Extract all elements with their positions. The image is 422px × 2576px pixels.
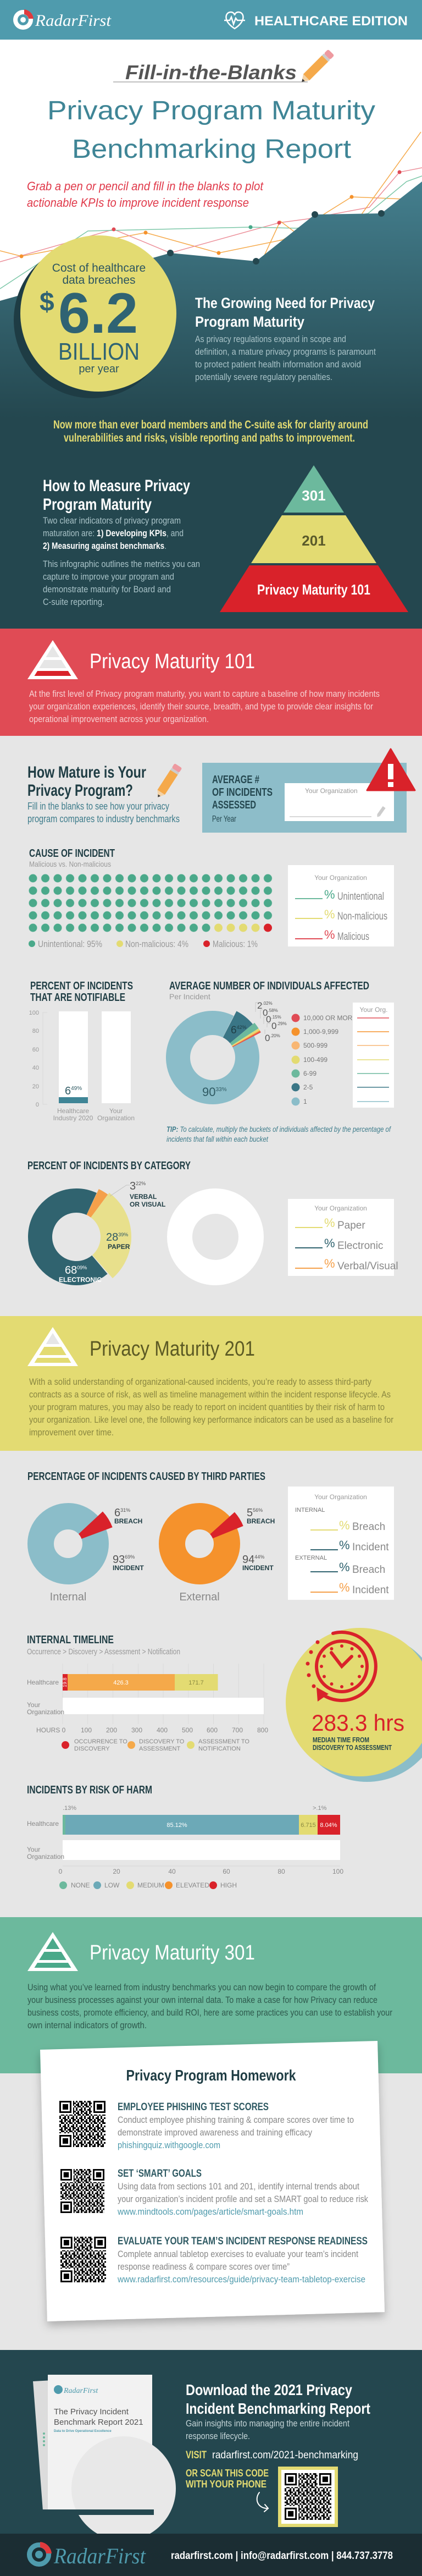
callout: cost circle: Cost of healthcare: [52, 262, 146, 274]
chart: incidents by risk of harm: Organization: [27, 1853, 64, 1861]
callout: median time circle: MEDIAN TIME FROM: [313, 1736, 369, 1744]
chart: cause of incident dots: [27, 847, 274, 949]
panel: download report: Incident Benchmarking Report: [186, 2400, 370, 2417]
panel: your org cause: Your Organization: [314, 874, 367, 882]
QR code: [278, 2467, 338, 2527]
chart: maturity pyramid: [220, 465, 408, 612]
chart: individuals affected donut: 6: [231, 1025, 237, 1036]
text block: how to measure: maturation are: 1) Developing KPIs, and: [43, 528, 184, 538]
panel: your org individuals: [353, 1003, 394, 1108]
chart: incidents by category: OR VISUAL: [130, 1201, 165, 1208]
logo: RadarFirst: RadarFirst: [35, 12, 112, 30]
item: tabletop: response readiness & compare scores over time”: [118, 2261, 290, 2272]
chart: internal timeline: 426.3: [113, 1680, 129, 1686]
chart: incidents by risk of harm: 100: [332, 1868, 343, 1875]
panel: download report: [0, 2350, 422, 2541]
chart: third parties donuts: PERCENTAGE OF INCIDENTS CAUSED BY THIRD PARTIES: [27, 1471, 265, 1483]
chart: internal timeline: 400: [157, 1726, 168, 1734]
panel: your org third parties: EXTERNAL: [295, 1555, 327, 1561]
callout: median time circle: 283.3 hrs: [312, 1710, 404, 1736]
internal donut: [25, 1500, 144, 1603]
chart: percent notifiable bars: 0: [36, 1102, 39, 1108]
chart: individuals affected donut: .15%: [271, 1015, 281, 1020]
chart: percent notifiable bars: PERCENT OF INCIDENTS: [30, 980, 133, 992]
heading: how mature: How Mature is Your: [27, 763, 146, 781]
text: 301 intro: Using what you’ve learned from industry benchmarks you can now begin to compare the growth of: [27, 1982, 376, 1992]
panel: your org category: %: [324, 1236, 335, 1250]
external donut: External: [179, 1591, 220, 1603]
icon: pencil: [154, 763, 182, 800]
internal donut: 93: [113, 1554, 125, 1566]
chart: individuals affected donut: 90: [202, 1085, 215, 1099]
main title: Benchmarking Report: [72, 135, 351, 164]
legend: 2-5: [303, 1083, 313, 1091]
panel: average incidents: Your Organization: [305, 787, 358, 795]
heading: how mature: [27, 763, 182, 824]
panel: your org cause: Unintentional: [337, 891, 384, 902]
chart: incidents by risk of harm: 8.04%: [320, 1822, 337, 1829]
text block: growing need: As privacy regulations expand in scope and: [195, 334, 346, 344]
chart: individuals affected donut: 0: [265, 1033, 270, 1043]
legend: [59, 1881, 237, 1889]
tip text: [166, 1125, 392, 1143]
text: 301 intro: [27, 1982, 392, 2030]
chart: percent notifiable bars: Your: [109, 1107, 123, 1115]
chart: cause of incident dots: CAUSE OF INCIDENT: [29, 847, 115, 860]
chart: internal timeline: 200: [106, 1726, 117, 1734]
chart: individuals affected donut: 42%: [237, 1025, 247, 1030]
chart: percent notifiable bars: 6: [65, 1085, 71, 1097]
chart: incidents by risk of harm: 85.12%: [166, 1822, 187, 1829]
chart: internal timeline: Organization: [27, 1708, 64, 1716]
chart: internal timeline: 600: [207, 1726, 218, 1734]
item: tabletop: [60, 2236, 368, 2285]
chart: percent notifiable bars: Healthcare: [57, 1107, 89, 1115]
chart: incidents by risk of harm: Healthcare: [27, 1820, 59, 1828]
panel: your org cause: Malicious: [337, 931, 369, 943]
legend: 1,000-9,999: [303, 1028, 338, 1036]
chart: internal timeline: HOURS: [36, 1726, 60, 1734]
chart: incidents by risk of harm: 20: [113, 1868, 120, 1875]
chart: maturity pyramid: 201: [302, 532, 326, 549]
panel: privacy maturity 101 banner: [0, 629, 422, 736]
chart: internal timeline: Your: [27, 1701, 40, 1709]
chart: incidents by risk of harm: Your: [27, 1846, 40, 1853]
chart: individuals affected donut: .58%: [268, 1008, 278, 1013]
internal donut: BREACH: [114, 1517, 142, 1525]
panel: average incidents: ASSESSED: [212, 799, 256, 811]
heading: how mature: Privacy Program?: [27, 781, 133, 800]
text: 201 intro: improvement over time.: [29, 1427, 114, 1438]
chart: incidents by category: ELECTRONIC: [59, 1276, 102, 1284]
chart: percent notifiable bars: 49%: [71, 1086, 82, 1092]
text block: growing need: potentially severe regulatory penalties.: [195, 372, 332, 382]
heading: 301: Privacy Maturity 301: [90, 1941, 255, 1964]
external donut: 56%: [253, 1507, 263, 1513]
chart: incidents by risk of harm: [27, 1784, 343, 1889]
chart: percent notifiable bars: Industry 2020: [53, 1114, 93, 1122]
item: smart goals: [60, 2168, 368, 2217]
chart: percent notifiable bars: [29, 980, 135, 1122]
chart: internal timeline: 19.8: [62, 1677, 68, 1687]
panel: your org third parties: INTERNAL: [295, 1507, 325, 1513]
fill-in-the-blanks heading: Fill-in-the-Blanks: [125, 61, 297, 84]
text block: growing need: definition, a mature privacy programs is paramount: [195, 346, 376, 357]
callout: cost circle: [14, 235, 176, 398]
callout: cost circle: per year: [79, 363, 119, 375]
chart: incidents by risk of harm: 6.715: [301, 1822, 316, 1829]
icon: pyramid 101: [27, 640, 78, 679]
legend: Non-malicious: 4%: [125, 939, 188, 949]
text block: how to measure: [43, 477, 200, 607]
subtitle red: [27, 179, 264, 210]
text block: growing need: Program Maturity: [195, 313, 304, 330]
chart: percent notifiable bars: 60: [32, 1047, 39, 1053]
chart: maturity pyramid: 301: [302, 487, 326, 504]
item: smart goals: Using data from sections 101 and 201, identify internal trends about: [118, 2181, 359, 2192]
panel: your org third parties: Your Organization: [314, 1493, 367, 1501]
chart: third parties donuts: [25, 1471, 275, 1603]
chart: internal timeline: 800: [257, 1726, 268, 1734]
book image: Data to Drive Operational Excellence: [54, 2430, 112, 2433]
chart: individuals affected donut: 0: [263, 1008, 268, 1018]
chart: incidents by category: [21, 1160, 251, 1292]
legend: 100-499: [303, 1056, 327, 1064]
callout: cost circle: data breaches: [62, 274, 136, 287]
footer: [0, 2534, 422, 2576]
internal donut: 31%: [120, 1507, 130, 1513]
text block: how to measure: This infographic outlines the metrics you can: [43, 559, 200, 569]
heading: 101: Privacy Maturity 101: [90, 650, 255, 673]
panel: your org third parties: %: [339, 1560, 350, 1574]
legend: 500-999: [303, 1042, 327, 1049]
icon: heart ECG: [224, 12, 245, 29]
item: phishing: [59, 2101, 354, 2150]
callout: cost circle: BILLION: [58, 338, 140, 365]
chart: internal timeline: 100: [81, 1726, 92, 1734]
text: 201 intro: With a solid understanding of organizational-caused incidents, you’re ready to assess third-party: [29, 1377, 371, 1387]
external donut: 5: [247, 1507, 253, 1519]
chart: percent notifiable bars: 100: [29, 1010, 39, 1016]
panel: average incidents: [202, 749, 415, 833]
panel: your org third parties: %: [339, 1518, 350, 1532]
chart: individuals affected donut: AVERAGE NUMBER OF INDIVIDUALS AFFECTED: [169, 980, 369, 992]
callout: median time circle: [286, 1628, 422, 1782]
text: 301 intro: own internal indicators of growth.: [27, 2020, 147, 2030]
panel: average incidents: OF INCIDENTS: [212, 786, 273, 799]
logo: RadarFirst: [13, 9, 112, 30]
item: tabletop: EVALUATE YOUR TEAM’S INCIDENT RESPONSE READINESS: [118, 2236, 368, 2247]
chart: incidents by category: 39%: [118, 1232, 128, 1237]
chart: individuals affected donut: 33%: [215, 1087, 227, 1093]
text block: how to measure: 2) Measuring against benchmarks.: [43, 541, 166, 551]
panel: your org individuals: Your Org.: [360, 1006, 387, 1014]
panel: your org third parties: [288, 1487, 394, 1600]
chart: incidents by category: 3: [130, 1180, 136, 1192]
legend: 6-99: [303, 1070, 316, 1077]
chart: percent notifiable bars: 80: [32, 1028, 39, 1034]
panel: download report: Gain insights into managing the entire incident: [186, 2418, 349, 2429]
contact info: radarfirst.com | info@radarfirst.com | 844.737.3778: [171, 2550, 393, 2562]
panel: homework card: Privacy Program Homework: [126, 2067, 296, 2084]
chart: internal timeline: 171.7: [188, 1680, 204, 1686]
decorative line chart: [0, 132, 422, 289]
panel: homework card: [40, 2041, 385, 2321]
external donut: 44%: [254, 1554, 264, 1560]
footer logo: [27, 2542, 146, 2568]
panel: your org category: %: [324, 1257, 335, 1270]
panel: your org category: [288, 1199, 398, 1276]
internal donut: INCIDENT: [113, 1564, 144, 1572]
panel: your org third parties: Breach: [352, 1564, 385, 1576]
chart: percent notifiable bars: 20: [32, 1083, 39, 1090]
edition label: HEALTHCARE EDITION: [254, 14, 408, 29]
item: tabletop: Complete annual tabletop exercises to evaluate your team’s incident: [118, 2249, 358, 2259]
panel: your org category: Paper: [337, 1220, 365, 1231]
external donut: [156, 1500, 275, 1603]
chart: internal timeline: Healthcare: [27, 1678, 59, 1686]
book image: [33, 2375, 176, 2541]
header bar: [0, 0, 422, 40]
legend: Malicious: 1%: [213, 939, 258, 949]
text: 101 intro: your organization experiences, identify their source, breadth, and type to provide clear insights for: [29, 701, 373, 712]
heading: 201: Privacy Maturity 201: [90, 1337, 255, 1361]
panel: your org third parties: Incident: [352, 1542, 389, 1553]
chart: individuals affected donut: .20%: [270, 1033, 280, 1038]
text block: how to measure: demonstrate maturity for Board and: [43, 584, 171, 595]
legend: ASSESSMENT: [139, 1746, 180, 1752]
chart: internal timeline: 500: [182, 1726, 193, 1734]
chart: incidents by risk of harm: .13%: [63, 1805, 76, 1812]
item: smart goals: SET ‘SMART’ GOALS: [118, 2168, 202, 2179]
panel: your org third parties: Breach: [352, 1521, 385, 1533]
icon: pyramid 201: [27, 1327, 78, 1366]
panel: privacy maturity 201 banner: [0, 1316, 422, 1451]
legend: [291, 1014, 357, 1105]
internal donut: 6: [114, 1507, 120, 1519]
chart: individuals affected donut: 0: [271, 1021, 276, 1031]
panel: your org category: Verbal/Visual: [337, 1261, 398, 1272]
callout: median time circle: DISCOVERY TO ASSESSMENT: [313, 1743, 392, 1752]
text block: growing need: to protect patient health information and avoid: [195, 359, 361, 370]
panel: your org cause: %: [324, 928, 335, 942]
panel: download report: OR SCAN THIS CODE: [186, 2468, 269, 2479]
chart: percent notifiable bars: THAT ARE NOTIFIABLE: [30, 992, 125, 1004]
panel: download report: radarfirst.com/2021-benchmarking: [212, 2450, 358, 2461]
chart: individuals affected donut: 2: [257, 1000, 262, 1011]
item: phishing: Conduct employee phishing training & compare scores over time to: [118, 2115, 354, 2125]
panel: your org cause: [288, 865, 394, 946]
book image: Benchmark Report 2021: [54, 2418, 143, 2427]
chart: internal timeline: INTERNAL TIMELINE: [27, 1634, 114, 1646]
panel: average incidents: AVERAGE #: [212, 774, 259, 786]
panel: your org category: Electronic: [337, 1240, 383, 1252]
text: 201 intro: [29, 1377, 393, 1438]
external donut: INCIDENT: [242, 1564, 274, 1572]
callout: cost circle: 6.2: [58, 282, 138, 345]
legend: OCCURRENCE TO: [74, 1738, 127, 1745]
legend: Unintentional: 95%: [38, 939, 102, 949]
panel: your org cause: Non-malicious: [337, 911, 387, 922]
item: tabletop: www.radarfirst.com/resources/guide/privacy-team-tabletop-exercise: [117, 2274, 365, 2285]
book image: The Privacy Incident: [54, 2407, 129, 2417]
legend: LOW: [104, 1881, 120, 1889]
heading: how mature: program compares to industry benchmarks: [27, 813, 180, 824]
chart: internal timeline: [27, 1634, 268, 1752]
icon: clock: [306, 1632, 376, 1702]
callout: cost circle: $: [40, 288, 54, 317]
chart: incidents by risk of harm: 60: [223, 1868, 230, 1875]
legend: [62, 1738, 249, 1752]
internal donut: Internal: [50, 1591, 86, 1603]
chart: incidents by category: 09%: [77, 1265, 87, 1270]
item: phishing: EMPLOYEE PHISHING TEST SCORES: [118, 2101, 269, 2113]
chart: incidents by category: PERCENT OF INCIDENTS BY CATEGORY: [27, 1160, 191, 1172]
legend: HIGH: [220, 1881, 237, 1889]
heading: how mature: Fill in the blanks to see how your privacy: [27, 801, 169, 812]
chart: incidents by risk of harm: 0: [59, 1868, 63, 1875]
text block: how to measure: Two clear indicators of privacy program: [43, 515, 181, 526]
legend: NONE: [71, 1881, 90, 1889]
chart: internal timeline: 300: [131, 1726, 142, 1734]
chart: percent notifiable bars: 40: [32, 1065, 39, 1071]
icon: pencil: [298, 49, 335, 85]
item: smart goals: www.mindtools.com/pages/article/smart-goals.htm: [117, 2206, 303, 2217]
chart: individuals affected donut: [158, 980, 369, 1112]
panel: your org third parties: %: [339, 1538, 350, 1552]
panel: your org cause: %: [324, 907, 335, 921]
chart: incidents by category: 22%: [136, 1181, 146, 1186]
item: phishing: demonstrate improved awareness and training efficacy: [118, 2127, 312, 2138]
chart: individuals affected donut: .29%: [276, 1021, 287, 1026]
hero white background: [0, 40, 422, 315]
chart: individuals affected donut: Per Incident: [169, 992, 210, 1001]
chart: incidents by risk of harm: >.1%: [313, 1805, 327, 1812]
fill-in-the-blanks heading: [113, 49, 335, 85]
legend: NOTIFICATION: [198, 1746, 241, 1752]
text block: growing need: [195, 295, 376, 382]
panel: your org cause: %: [324, 888, 335, 901]
chart: incidents by risk of harm: 80: [277, 1868, 285, 1875]
blank donut: [180, 1201, 251, 1273]
subtitle red: actionable KPIs to improve incident response: [27, 196, 249, 210]
legend: DISCOVERY: [74, 1746, 110, 1752]
panel: teal intro: [0, 181, 422, 629]
icon: warning: [367, 749, 415, 790]
subtitle red: Grab a pen or pencil and fill in the blanks to plot: [27, 179, 264, 193]
text: 101 intro: [29, 689, 380, 724]
legend: 10,000 OR MORE: [303, 1014, 357, 1022]
panel: your org category: %: [324, 1216, 335, 1230]
item: smart goals: your organization’s incident profile and set a SMART goal to reduce risk: [118, 2194, 368, 2204]
panel: your org category: Your Organization: [314, 1204, 367, 1212]
panel: privacy maturity 301 banner: [0, 1917, 422, 2073]
text block: how to measure: Program Maturity: [43, 496, 152, 514]
legend: [29, 939, 258, 949]
external donut: BREACH: [247, 1517, 275, 1525]
legend: MEDIUM: [137, 1881, 164, 1889]
internal donut: 69%: [125, 1554, 135, 1560]
arrow: [257, 2492, 268, 2512]
chart: incidents by category: 28: [106, 1231, 118, 1243]
chart: cause of incident dots: Malicious vs. Non-malicious: [29, 860, 111, 868]
panel: your org third parties: Incident: [352, 1584, 389, 1596]
chart: maturity pyramid: Privacy Maturity 101: [257, 581, 370, 598]
text block: how to measure: How to Measure Privacy: [43, 477, 190, 495]
icon: pyramid 301: [27, 1932, 78, 1971]
main title: [47, 96, 375, 164]
chart: incidents by risk of harm: INCIDENTS BY RISK OF HARM: [27, 1784, 152, 1796]
panel: download report: WITH YOUR PHONE: [186, 2479, 266, 2490]
panel: download report: Download the 2021 Privacy: [186, 2381, 352, 2398]
chart: individuals affected donut: 0: [266, 1014, 271, 1025]
chart: incidents by category: PAPER: [108, 1243, 130, 1251]
tip text: incidents that fall within each bucket: [166, 1135, 269, 1143]
text block: how to measure: C-suite reporting.: [43, 597, 104, 607]
footer logo: RadarFirst: [53, 2544, 146, 2568]
text block: how to measure: capture to improve your program and: [43, 571, 174, 582]
main title: Privacy Program Maturity: [47, 96, 375, 125]
text: 101 intro: operational improvement across your organization.: [29, 714, 209, 724]
chart: internal timeline: 700: [232, 1726, 243, 1734]
panel: your org third parties: %: [339, 1581, 350, 1594]
panel: download report: VISIT: [186, 2450, 207, 2461]
chart: incidents by category: VERBAL: [130, 1193, 157, 1201]
item: phishing: phishingquiz.withgoogle.com: [118, 2140, 220, 2150]
chart: incidents by category: 68: [65, 1264, 77, 1276]
text block: growing need: The Growing Need for Privacy: [195, 295, 375, 311]
legend: ELEVATED: [176, 1881, 209, 1889]
book image: RadarFirst: [63, 2387, 98, 2395]
panel: average incidents: Per Year: [212, 814, 236, 824]
legend: ASSESSMENT TO: [198, 1738, 249, 1745]
panel: download report: response lifecycle.: [186, 2431, 250, 2441]
legend: DISCOVERY TO: [139, 1738, 185, 1745]
external donut: 94: [242, 1554, 254, 1566]
chart: percent notifiable bars: Organization: [97, 1114, 135, 1122]
chart: internal timeline: Occurrence > Discovery > Assessment > Notification: [27, 1647, 180, 1656]
legend: 1: [303, 1098, 307, 1105]
chart: individuals affected donut: .02%: [262, 1001, 273, 1006]
callout: board statement: [53, 419, 368, 444]
chart: internal timeline: 0: [62, 1726, 66, 1734]
chart: incidents by risk of harm: 40: [168, 1868, 176, 1875]
